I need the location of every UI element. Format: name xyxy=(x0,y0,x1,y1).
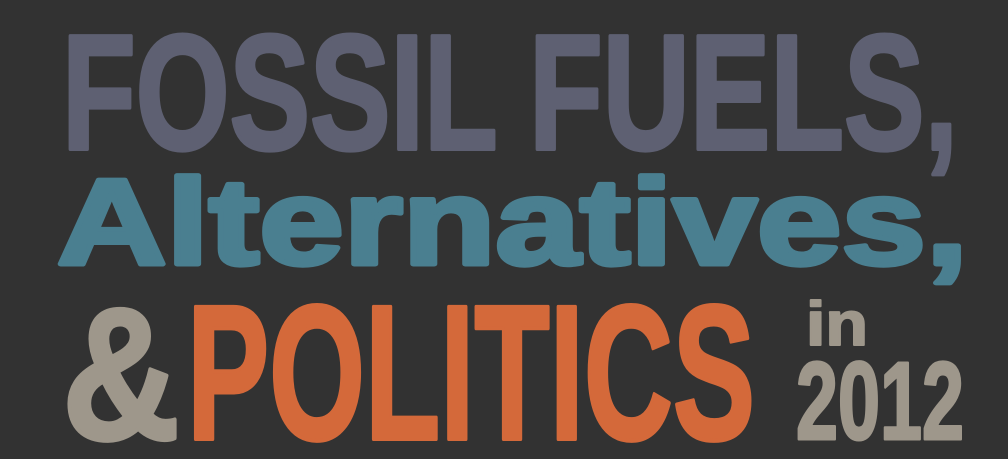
text: in: in xyxy=(806,290,868,359)
heading line 2: Alternatives,: Alternatives, xyxy=(57,154,968,290)
